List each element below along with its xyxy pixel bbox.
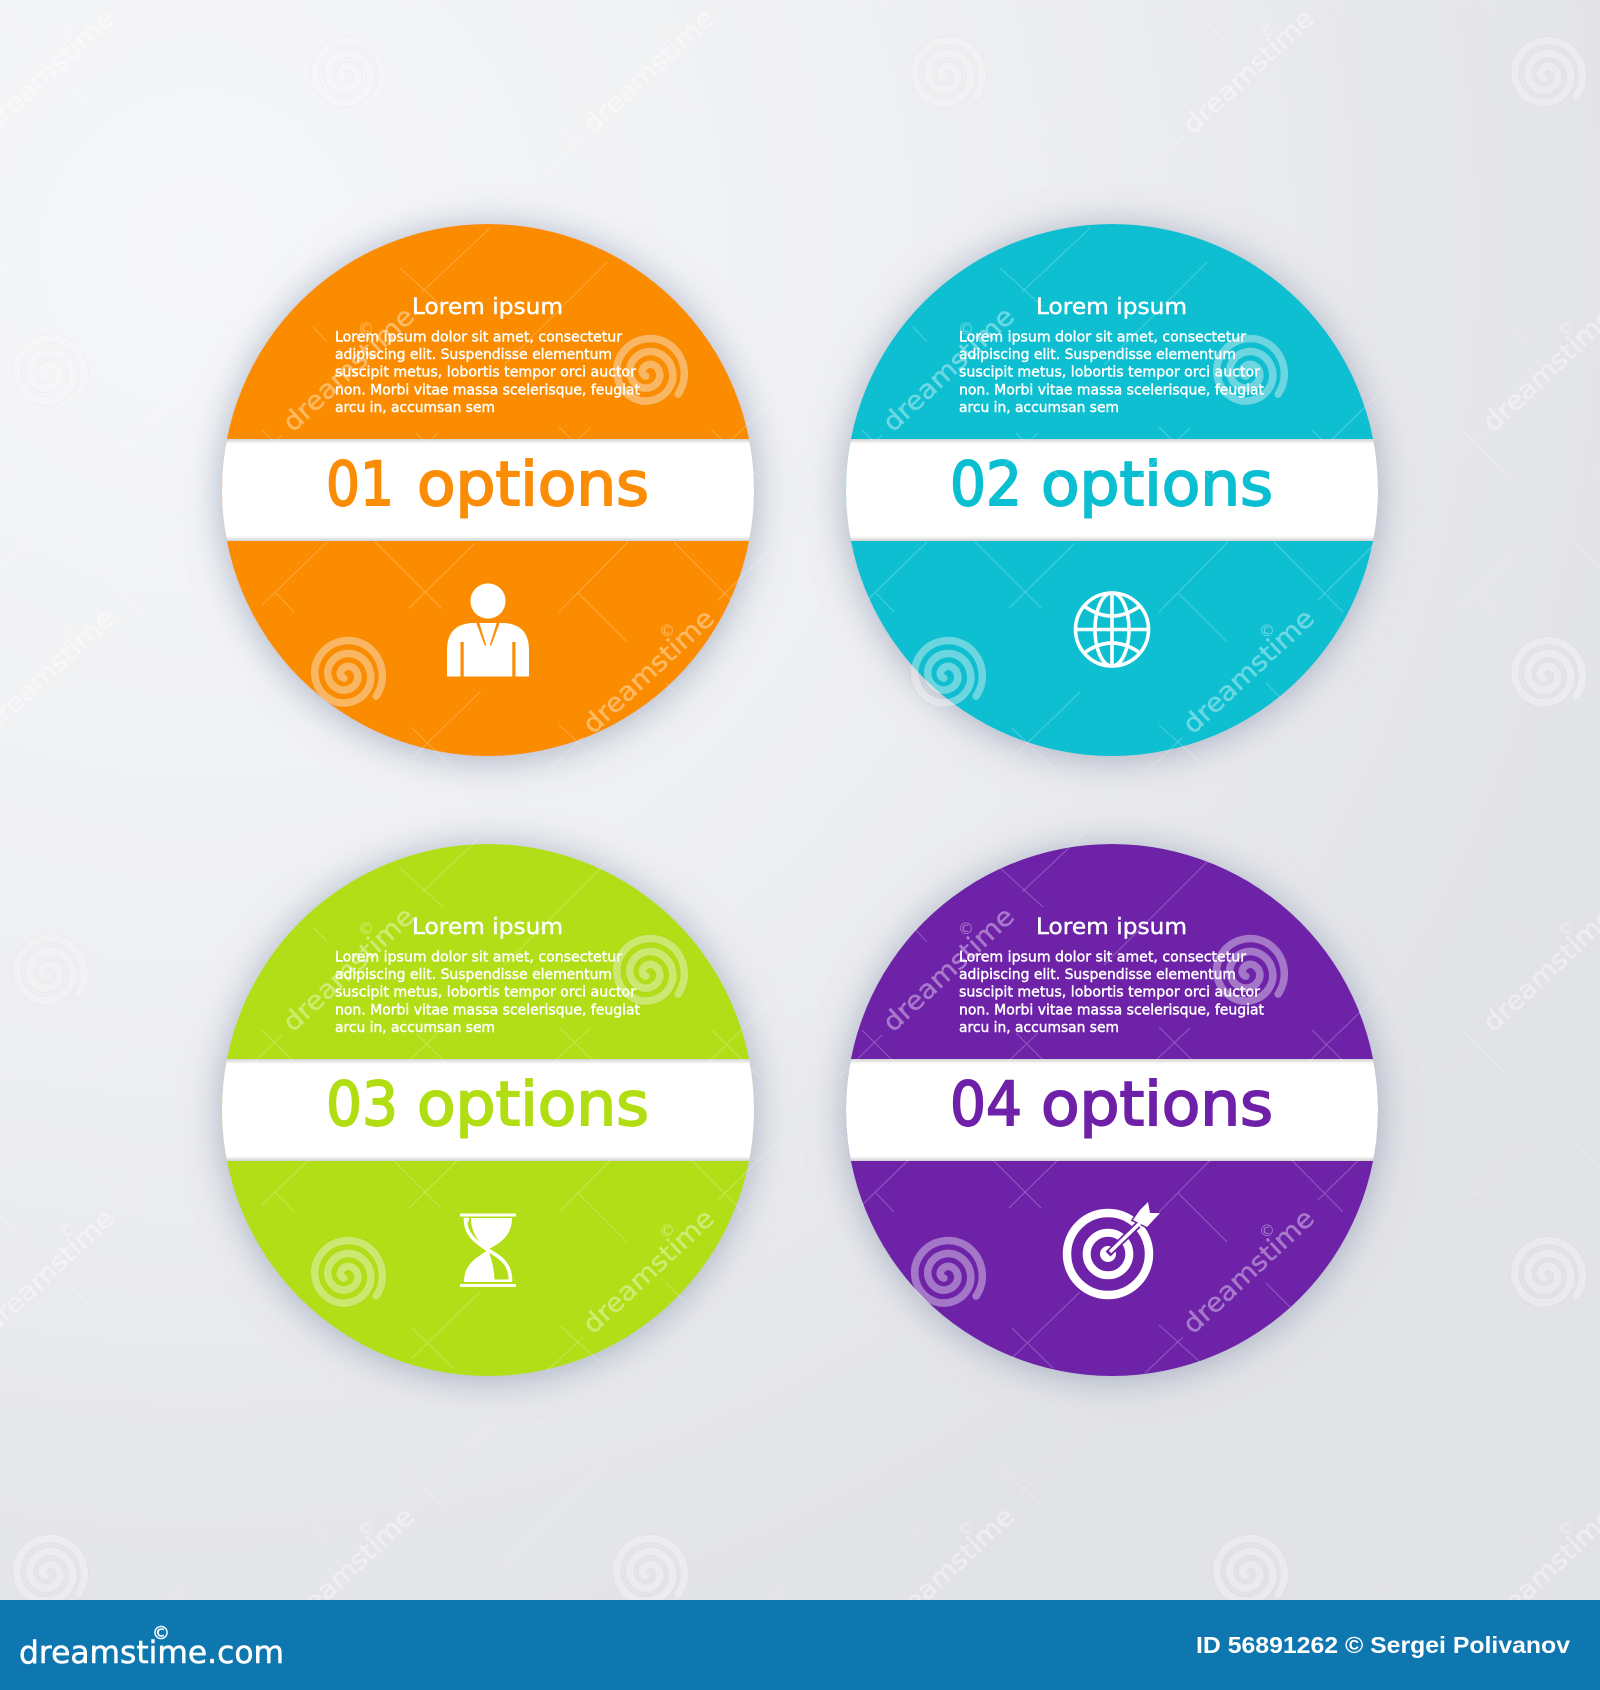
label: 04 options: 04 bbox=[950, 1069, 1022, 1140]
text block: 03 body: Lorem ipsum dolor sit amet, consectetur bbox=[335, 950, 622, 966]
text block: 02 body bbox=[959, 330, 1264, 416]
footer logo: dreamstime.com: © bbox=[152, 1623, 170, 1644]
text block: 03 body bbox=[335, 950, 640, 1036]
icon: hourglass bbox=[460, 1214, 516, 1287]
text block: 04 body: arcu in, accumsan sem bbox=[959, 1020, 1119, 1036]
band: 03 options bbox=[222, 1059, 754, 1161]
heading: 02: Lorem ipsum bbox=[1036, 295, 1187, 320]
panel: circle 04 options (purple) bbox=[846, 844, 1378, 1376]
text block: 02 body: adipiscing elit. Suspendisse elementum bbox=[959, 347, 1236, 363]
text block: 01 body: adipiscing elit. Suspendisse elementum bbox=[335, 347, 612, 363]
band: 04 options bbox=[846, 1059, 1378, 1161]
text block: 01 body: suscipit metus, lobortis tempor orci auctor bbox=[335, 364, 636, 380]
text block: 02 body: non. Morbi vitae massa scelerisque, feugiat bbox=[959, 382, 1264, 398]
icon: businessman bbox=[447, 583, 529, 676]
text block: 03 body: non. Morbi vitae massa scelerisque, feugiat bbox=[335, 1002, 640, 1018]
text block: 02 body: Lorem ipsum dolor sit amet, consectetur bbox=[959, 330, 1246, 346]
text block: 03 body: adipiscing elit. Suspendisse elementum bbox=[335, 967, 612, 983]
text block: 02 body: arcu in, accumsan sem bbox=[959, 400, 1119, 416]
text block: 04 body: non. Morbi vitae massa scelerisque, feugiat bbox=[959, 1002, 1264, 1018]
heading: 04: Lorem ipsum bbox=[1036, 915, 1187, 940]
icon: globe bbox=[1076, 593, 1148, 666]
text block: 02 body: suscipit metus, lobortis tempor orci auctor bbox=[959, 364, 1260, 380]
heading: 01: Lorem ipsum bbox=[412, 295, 563, 320]
panel: circle 02 options (teal) bbox=[846, 224, 1378, 756]
text block: 03 body: suscipit metus, lobortis tempor orci auctor bbox=[335, 984, 636, 1000]
label: 03 options: 03 bbox=[326, 1069, 398, 1140]
label: 04 options bbox=[950, 1069, 1273, 1140]
text block: 04 body: suscipit metus, lobortis tempor orci auctor bbox=[959, 984, 1260, 1000]
text block: 01 body: non. Morbi vitae massa scelerisque, feugiat bbox=[335, 382, 640, 398]
label: 02 options: options bbox=[1041, 449, 1273, 520]
label: 01 options: options bbox=[417, 449, 649, 520]
text block: 01 body: arcu in, accumsan sem bbox=[335, 400, 495, 416]
icon: target with arrow bbox=[1067, 1202, 1160, 1295]
footer logo: dreamstime.com: dreamstime.com bbox=[19, 1635, 284, 1671]
footer credit: ID 56891262 © Sergei Polivanov bbox=[1196, 1632, 1570, 1658]
label: 03 options bbox=[326, 1069, 649, 1140]
text block: 01 body: Lorem ipsum dolor sit amet, consectetur bbox=[335, 330, 622, 346]
panel: circle 03 options (green) bbox=[222, 844, 754, 1376]
text block: 04 body: Lorem ipsum dolor sit amet, consectetur bbox=[959, 950, 1246, 966]
band: 02 options bbox=[846, 439, 1378, 541]
text block: 04 body bbox=[959, 950, 1264, 1036]
label: 03 options: options bbox=[417, 1069, 649, 1140]
panel: circle 01 options (orange) bbox=[222, 224, 754, 756]
heading: 03: Lorem ipsum bbox=[412, 915, 563, 940]
text block: 01 body bbox=[335, 330, 640, 416]
band: 01 options bbox=[222, 439, 754, 541]
label: 01 options: 01 bbox=[326, 449, 394, 520]
label: 04 options: options bbox=[1041, 1069, 1273, 1140]
text block: 03 body: arcu in, accumsan sem bbox=[335, 1020, 495, 1036]
label: 02 options: 02 bbox=[950, 449, 1022, 520]
label: 02 options bbox=[950, 449, 1273, 520]
text block: 04 body: adipiscing elit. Suspendisse elementum bbox=[959, 967, 1236, 983]
label: 01 options bbox=[326, 449, 649, 520]
footer bar bbox=[0, 1600, 1600, 1690]
